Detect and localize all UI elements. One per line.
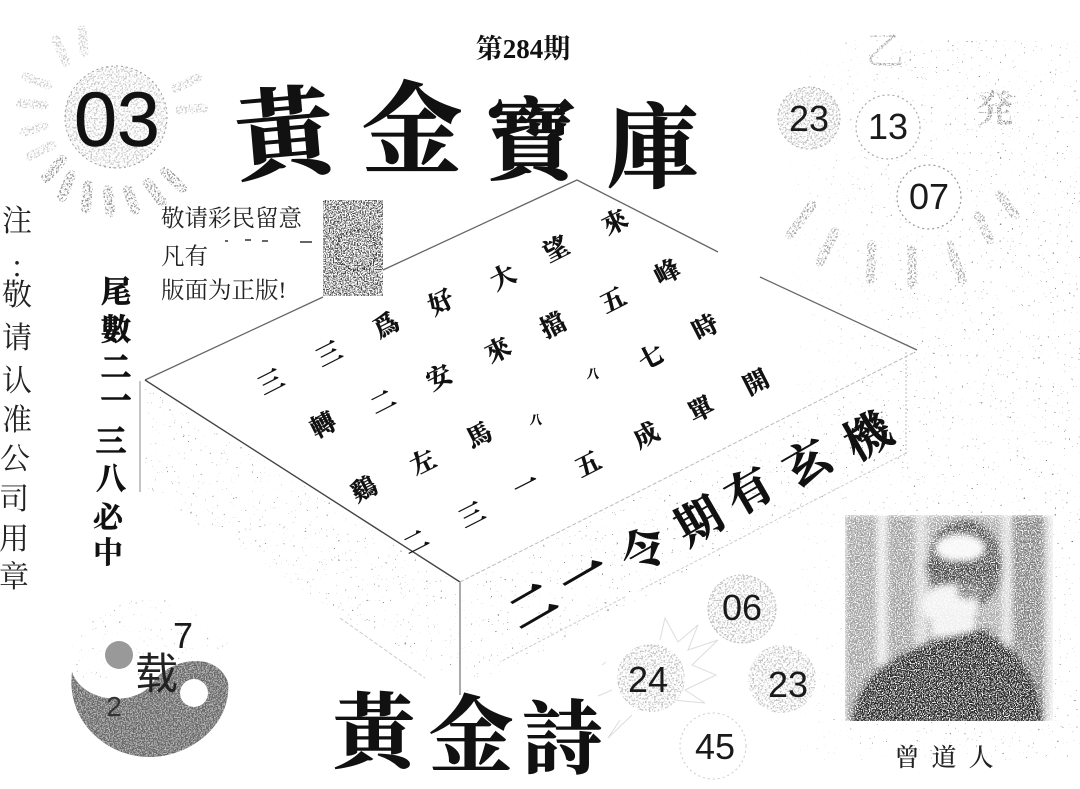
main title: 寶 (486, 68, 578, 198)
poem characters on box top: 擋 (533, 302, 572, 346)
poem characters on box top: 望 (536, 226, 575, 270)
notice text (161, 205, 312, 304)
vertical note: official stamp: : (12, 241, 22, 285)
ball 06 (708, 575, 776, 643)
yin-yang symbol: 载 (135, 651, 178, 699)
slogan on box front: 二 (495, 563, 568, 644)
ball 24 (617, 644, 685, 712)
ball 13: 13 (868, 106, 908, 147)
isometric box (140, 180, 917, 695)
poem characters on box top: 左 (403, 439, 442, 483)
poem characters on box top: 二 (396, 519, 435, 563)
bottom title: 黃 (333, 668, 425, 785)
vertical note: official stamp (0, 196, 32, 596)
ball 23 (778, 87, 840, 149)
slogan on box front (495, 392, 905, 644)
bottom title: 詩 (522, 675, 602, 789)
poem characters on box top: 轉 (303, 402, 342, 446)
poem characters on box top: 鷄 (344, 466, 383, 510)
ball 23: 23 (789, 98, 829, 139)
yin-yang symbol (70, 600, 230, 757)
notice text: 版面为正版! (161, 277, 286, 304)
poem characters on box top: 單 (681, 386, 720, 430)
ball 45: 45 (695, 726, 735, 767)
poem characters on box top: 八 (587, 365, 599, 382)
head (927, 519, 1003, 611)
box left face shading (145, 385, 460, 680)
slogan on box front: 一 (546, 533, 619, 614)
poem characters on box top (251, 199, 775, 563)
ball 23 (748, 645, 816, 713)
body (850, 628, 1044, 725)
ball 23: 23 (768, 664, 808, 705)
slogan on box front: 有 (711, 448, 784, 529)
vertical note: official stamp: 公 (0, 434, 30, 478)
vertical tail-number tip: 三 (96, 417, 126, 461)
poem characters on box top: 七 (631, 334, 670, 378)
vertical note: official stamp: 敬 (2, 270, 32, 314)
notice text: 凡有 (161, 243, 208, 270)
notice text: 敬请彩民留意 (161, 205, 302, 232)
poem characters on box top: 五 (593, 277, 632, 321)
ball 24: 24 (628, 659, 668, 700)
bottom star with numbers (598, 575, 816, 779)
poem characters on box top: 三 (309, 331, 348, 375)
slogan on box front: 令 (606, 507, 679, 588)
vertical tail-number tip: 必 (93, 493, 126, 537)
poem characters on box top: 二 (363, 379, 402, 423)
main title: 庫 (607, 75, 699, 207)
poem characters on box top: 五 (568, 441, 607, 485)
poem characters on box top: 大 (483, 254, 522, 298)
ball 13 (856, 95, 920, 159)
main title: 黃 (229, 52, 351, 202)
poem characters on box top: 來 (478, 327, 517, 371)
poem characters on box top: 馬 (459, 412, 498, 456)
right sun with numbers (778, 20, 1015, 285)
yin-yang symbol: 2 (106, 691, 122, 722)
poem characters on box top: 安 (419, 353, 460, 398)
ball 07 (897, 165, 961, 229)
left sun with number 03: 03 (74, 77, 160, 163)
stamp image (323, 200, 383, 296)
ball 06: 06 (722, 587, 762, 628)
vertical tail-number tip: 尾 (101, 267, 131, 311)
portrait caption: 曾道人 (894, 738, 1006, 774)
vertical note: official stamp: 认 (2, 356, 32, 400)
poem characters on box top: 成 (626, 412, 665, 456)
portrait photo (845, 515, 1053, 725)
slogan on box front: 機 (830, 392, 905, 474)
left sun with number 03 (20, 30, 204, 212)
poem characters on box top: 好 (421, 279, 460, 323)
vertical tail-number tip: 一 (101, 376, 131, 420)
poem characters on box top: 峰 (647, 249, 686, 293)
background speckle on the right (780, 40, 1080, 760)
vertical tail-number tip: 中 (93, 528, 123, 572)
vertical tail-number tip: 二 (101, 343, 131, 387)
vertical note: official stamp: 准 (2, 395, 32, 439)
main title: 金 (362, 50, 462, 194)
poem characters on box top: 時 (685, 304, 724, 348)
box top edges (145, 180, 917, 380)
vertical tail-number tip: 數 (101, 305, 131, 349)
vertical tail-number tip (93, 267, 131, 572)
yin-yang symbol: 7 (173, 615, 193, 656)
ball 07: 07 (909, 176, 949, 217)
faint character: 乙 (866, 20, 904, 75)
bottom title (333, 668, 602, 789)
bottom title: 金 (429, 669, 513, 789)
poem characters on box top: 來 (595, 199, 634, 243)
faint character: 発 (976, 78, 1014, 133)
slogan on box front: 期 (661, 478, 734, 559)
vertical note: official stamp: 请 (2, 313, 32, 357)
main title (229, 50, 699, 207)
poem characters on box top: 開 (736, 359, 775, 403)
vertical note: official stamp: 注 (2, 196, 32, 240)
title: issue number: 第284期 (476, 34, 570, 64)
slogan on box front: 玄 (769, 419, 845, 501)
box right face shading (462, 355, 915, 695)
poem characters on box top: 三 (251, 359, 290, 403)
poem characters on box top: 八 (530, 411, 542, 428)
vertical tail-number tip: 八 (96, 454, 126, 498)
poem characters on box top: 爲 (366, 302, 405, 346)
poem characters on box top: 一 (506, 462, 545, 506)
poem characters on box top: 三 (452, 492, 491, 536)
ball 45 (680, 713, 746, 779)
